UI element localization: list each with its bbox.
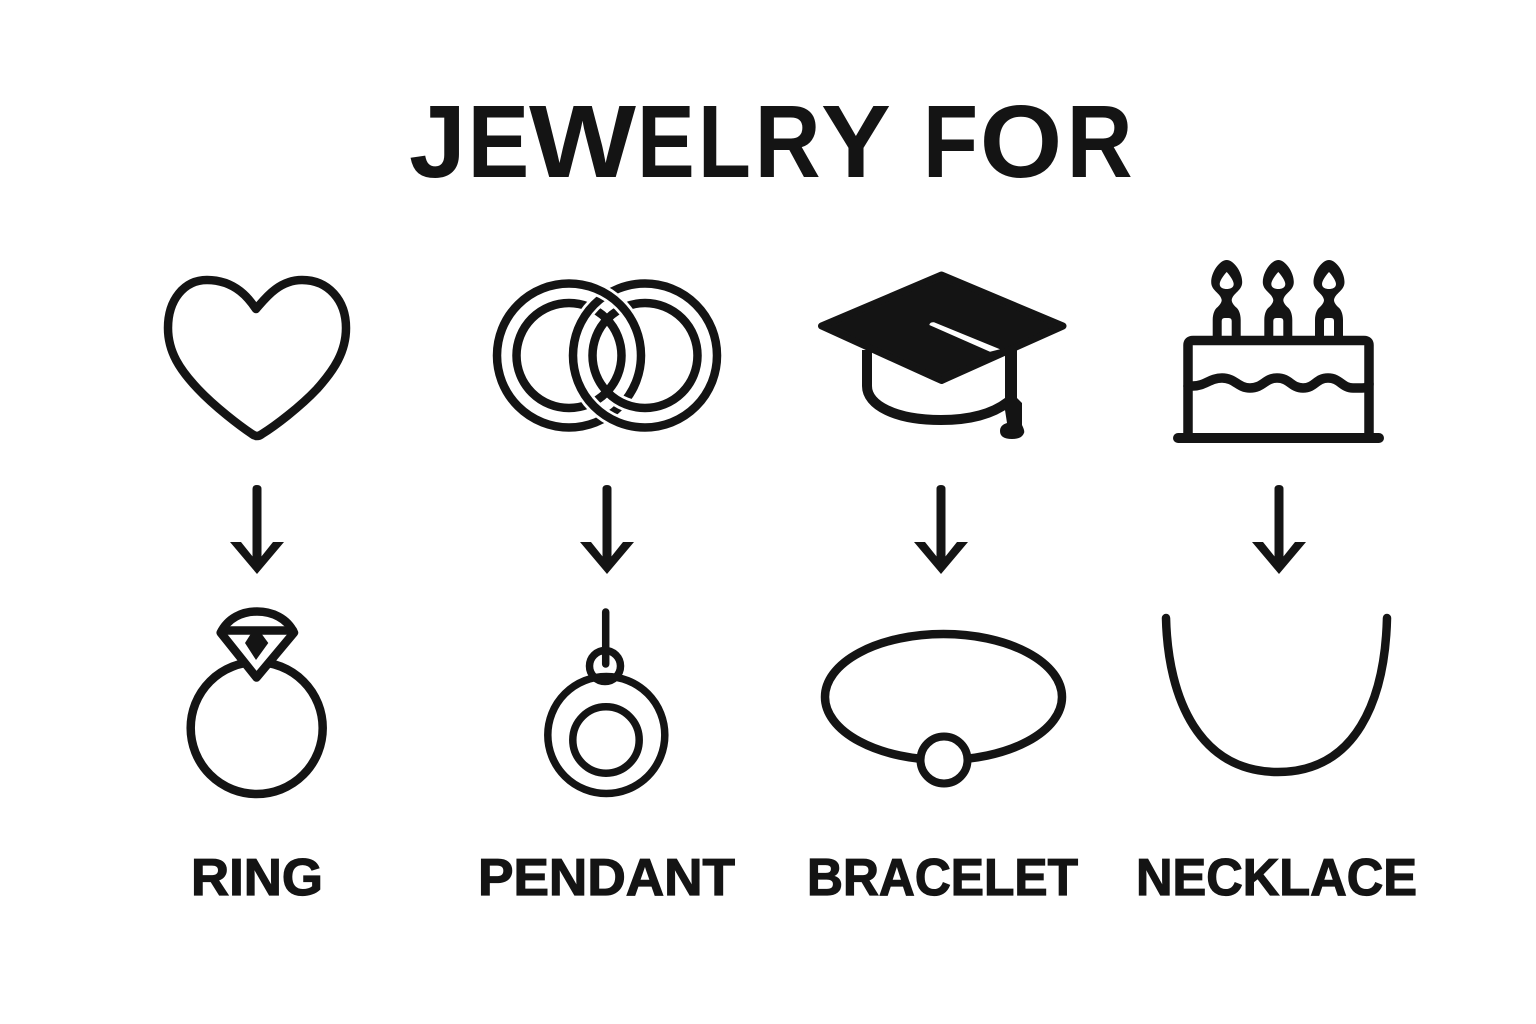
title: W [529,84,637,199]
label: pendant: PENDANT [478,849,735,907]
title: O [980,84,1062,199]
gem bar [222,626,293,635]
bracelet band [825,634,1062,760]
candle 1 [1211,260,1242,338]
label: bracelet: BRACELET [807,849,1078,907]
title: E [637,84,695,199]
title: E [468,84,529,199]
tassel [1000,350,1024,439]
candle 2 [1263,260,1294,338]
gem stone [245,634,268,660]
title: R [1067,84,1133,199]
title: L [698,84,751,199]
icon: interlocked wedding rings [497,284,717,428]
ring band [191,662,323,794]
arrow: rings to pendant [580,485,634,574]
bracelet charm [920,736,968,784]
pendant outer circle [548,676,665,794]
title: F [923,84,978,199]
cake plate [1178,433,1379,443]
icon: necklace [1166,618,1387,772]
icon: pendant [548,612,665,794]
arrow: cake to necklace [1252,485,1306,574]
arrow: cap to bracelet [914,485,968,574]
pendant chain [602,612,609,664]
icon: diamond ring [191,612,323,794]
title: J [409,84,466,199]
cake body [1188,340,1369,438]
infographic [164,105,1416,896]
label: necklace: NECKLACE [1136,849,1417,907]
label: ring: RING [191,849,323,907]
pendant inner circle [573,707,639,773]
icon: heart [168,280,346,436]
icing wave [1188,378,1369,388]
title: Y [821,84,890,199]
icon: birthday cake [1178,260,1379,438]
candle 3 [1314,260,1344,338]
cap base and band [867,350,1008,420]
icon: graduation cap [822,275,1063,439]
title: R [755,84,821,199]
mortarboard slot [929,322,1000,352]
gem outline [221,612,294,678]
arrow: heart to ring [230,485,284,574]
icon: bracelet [825,634,1062,784]
mortarboard [822,275,1063,380]
pendant loop [590,650,620,682]
